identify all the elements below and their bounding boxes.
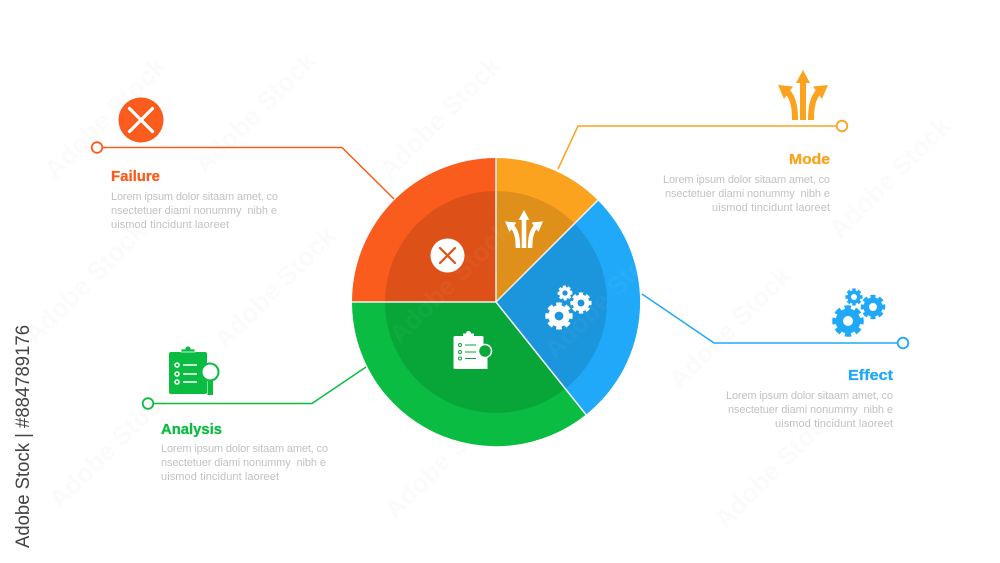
text: Adobe Stock (663, 260, 797, 394)
pie chart (352, 158, 672, 446)
pie segment: mode (496, 158, 598, 302)
icon: pie effect gears (547, 287, 590, 328)
heading: analysis: Analysis (161, 421, 222, 438)
body: failure (111, 191, 278, 231)
stock id label: Adobe Stock | #884789176 (12, 325, 34, 548)
connector: analysis (143, 367, 366, 409)
body: analysis: nsectetuer diami nonummy nibh e (161, 457, 326, 469)
text: Adobe Stock (43, 380, 177, 514)
icon: analysis clipboard (169, 346, 218, 395)
text: Adobe Stock (208, 220, 342, 354)
icon: mode arrows (778, 70, 828, 120)
connector: mode (558, 121, 847, 169)
body: failure: nsectetuer diami nonummy nibh e (111, 205, 277, 217)
text: Adobe Stock (188, 45, 322, 179)
heading: effect: Effect (848, 367, 893, 384)
body: analysis: uismod tincidunt laoreet (161, 471, 279, 483)
connector: effect (642, 294, 908, 348)
body: effect (726, 390, 893, 430)
body: mode: nsectetuer diami nonummy nibh e (665, 188, 830, 200)
body: effect: Lorem ipsum dolor sitaam amet, co (726, 390, 893, 402)
icon: failure cross (118, 98, 164, 142)
body: analysis: Lorem ipsum dolor sitaam amet, co (161, 443, 328, 455)
text block: analysis (161, 421, 328, 483)
body: failure: Lorem ipsum dolor sitaam amet, co (111, 191, 278, 203)
body: effect: nsectetuer diami nonummy nibh e (728, 404, 893, 416)
heading: mode: Mode (789, 151, 830, 168)
body: mode: Lorem ipsum dolor sitaam amet, co (663, 174, 830, 186)
body: effect: uismod tincidunt laoreet (775, 418, 893, 430)
text: Adobe Stock (18, 215, 152, 349)
text block: effect (726, 367, 893, 430)
pie segment: effect (496, 200, 640, 415)
connector: failure (92, 142, 394, 199)
icon: pie mode arrows (505, 210, 543, 248)
text: Adobe Stock (823, 110, 957, 244)
heading: failure: Failure (111, 168, 160, 185)
icon: pie failure cross (430, 238, 464, 272)
pie chart: Adobe Stock (383, 215, 517, 349)
pie segment: failure (352, 158, 496, 302)
inner shaded circle (385, 191, 607, 413)
pie chart: Adobe Stock (538, 230, 672, 364)
body: mode: uismod tincidunt laoreet (712, 202, 830, 214)
text: Adobe Stock (373, 50, 507, 184)
text block: failure (111, 168, 278, 231)
icon: pie analysis clipboard (454, 331, 492, 369)
text: Adobe Stock (378, 390, 512, 524)
text: Adobe Stock (38, 50, 172, 184)
pie segment: analysis (352, 302, 586, 446)
text block: mode (663, 151, 830, 214)
text: Adobe Stock (708, 400, 842, 534)
body: analysis (161, 443, 328, 483)
body: failure: uismod tincidunt laoreet (111, 219, 229, 231)
icon: effect gears (834, 290, 884, 334)
body: mode (663, 174, 830, 214)
